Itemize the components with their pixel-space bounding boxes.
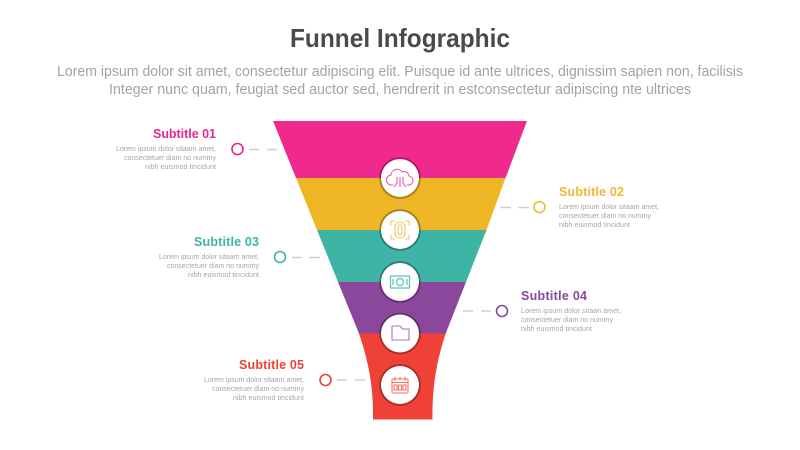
step circle 2 bbox=[379, 209, 421, 251]
icon: calendar bbox=[392, 377, 408, 393]
icon: fingerprint bbox=[391, 221, 409, 239]
body text 01: nibh euismod tincidunt bbox=[145, 164, 216, 171]
funnel chart bbox=[273, 121, 527, 420]
marker 03 bbox=[274, 252, 286, 262]
intro text: Lorem ipsum dolor sit amet, consectetur adipiscing elit. Puisque id ante ultrices, dignissim sapien non, facilisis bbox=[57, 64, 743, 80]
step circle 5 bbox=[379, 364, 421, 406]
callout: subtitle 04 bbox=[463, 289, 621, 333]
marker 02 bbox=[534, 202, 545, 212]
step circle 4 bbox=[379, 313, 421, 354]
body text 04: consectetuer diam no nummy bbox=[521, 317, 614, 324]
body text 02 bbox=[559, 204, 659, 229]
funnel segment 4 bbox=[338, 282, 466, 334]
heading 03: Subtitle 03 bbox=[194, 235, 259, 249]
marker 04 bbox=[496, 306, 508, 316]
step circle 1 bbox=[379, 157, 421, 199]
body text 05: consectetuer diam no nummy bbox=[212, 386, 304, 393]
body text 03: consectetuer diam no nummy bbox=[167, 263, 260, 270]
title: Funnel Infographic bbox=[290, 23, 510, 53]
body text 03: Lorem ipsum dolor sitaam amet, bbox=[159, 254, 259, 261]
body text 05: Lorem ipsum dolor sitaam amet, bbox=[204, 377, 304, 384]
heading 01: Subtitle 01 bbox=[153, 127, 216, 141]
heading 05: Subtitle 05 bbox=[239, 358, 304, 372]
body text 01: Lorem ipsum dolor sitaam amet, bbox=[116, 146, 216, 153]
intro text bbox=[57, 64, 743, 98]
body text 02: Lorem ipsum dolor sitaam amet, bbox=[559, 204, 659, 211]
body text 05 bbox=[204, 377, 304, 402]
marker 01 bbox=[232, 144, 243, 154]
body text 04: nibh euismod tincidunt bbox=[521, 326, 592, 333]
callout: subtitle 01 bbox=[116, 127, 277, 171]
body text 02: consectetuer diam no nummy bbox=[559, 213, 652, 220]
callout: subtitle 05 bbox=[204, 358, 365, 402]
body text 04 bbox=[521, 308, 621, 333]
marker 05 bbox=[320, 374, 331, 386]
body text 03 bbox=[159, 254, 260, 279]
body text 03: nibh euismod tincidunt bbox=[188, 272, 259, 279]
icon: folder bbox=[392, 326, 409, 340]
funnel segment 1 bbox=[273, 121, 527, 178]
intro text: Integer nunc quam, feugiat sed auctor sed, hendrerit in estconsectetur adipiscing nte ultrices bbox=[109, 82, 691, 98]
callout: subtitle 02 bbox=[500, 185, 659, 229]
body text 04: Lorem ipsum dolor sitaan amet, bbox=[521, 308, 621, 315]
icon: banknote bbox=[390, 276, 410, 288]
callout: subtitle 03 bbox=[159, 235, 320, 279]
funnel segment 3 bbox=[317, 230, 486, 282]
step circle 3 bbox=[379, 261, 421, 303]
heading 02: Subtitle 02 bbox=[559, 185, 624, 199]
icon: cloud network bbox=[386, 169, 413, 187]
body text 02: nibh euismod tincidunt bbox=[559, 222, 630, 229]
funnel segment 2 bbox=[296, 178, 506, 230]
body text 05: nibh euismod tincidunt bbox=[233, 395, 304, 402]
body text 01 bbox=[116, 146, 216, 171]
funnel segment 5 bbox=[359, 334, 446, 420]
heading 04: Subtitle 04 bbox=[521, 289, 587, 303]
body text 01: consectetuer diam no nummy bbox=[124, 155, 216, 162]
